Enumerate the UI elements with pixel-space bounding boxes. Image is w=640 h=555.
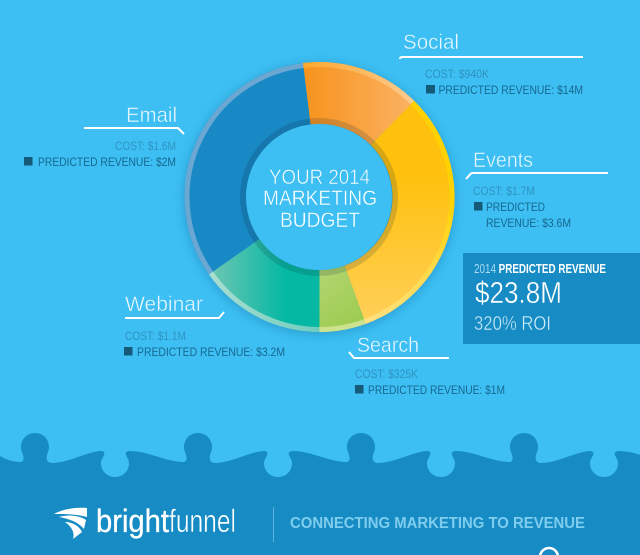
center title: MARKETING (263, 186, 377, 210)
donut chart (184, 62, 456, 335)
label: search: PREDICTED REVENUE: $1M (368, 383, 505, 397)
logo wordmark: bright (96, 503, 169, 539)
panel: total predicted revenue: $23.8M (475, 275, 562, 310)
inner shadow ring (243, 121, 395, 273)
tagline: CONNECTING MARKETING TO REVENUE (290, 515, 585, 532)
segment: social (303, 62, 414, 145)
label: email: PREDICTED REVENUE: $2M (38, 155, 176, 169)
label: events: Events (473, 148, 533, 172)
icon: brightfunnel logo mark (54, 508, 87, 539)
label: search (349, 333, 505, 397)
label: social: PREDICTED REVENUE: $14M (438, 83, 583, 97)
label: email: Email (126, 103, 177, 127)
label: social (400, 30, 583, 97)
label: search: COST: $325K (355, 367, 418, 381)
center title: YOUR 2014 (269, 165, 370, 189)
outer rim (187, 65, 452, 329)
panel: total predicted revenue (463, 253, 640, 344)
logo wordmark: funnel (169, 503, 236, 539)
label: email: COST: $1.6M (115, 139, 176, 153)
logo wordmark (96, 503, 236, 539)
label: events: PREDICTED (486, 200, 545, 214)
segment: webinar (209, 239, 320, 332)
label: social: COST: $940K (425, 67, 489, 81)
segment: search (320, 266, 366, 332)
label: events: COST: $1.7M (473, 184, 535, 198)
segment: events (344, 101, 455, 324)
label: events (466, 148, 608, 230)
label: social: Social (403, 30, 459, 54)
label: search: Search (357, 333, 419, 357)
icon: cropped circle at bottom edge (540, 548, 558, 555)
panel: total predicted revenue: 2014 PREDICTED REVENUE (474, 262, 606, 276)
footer divider (273, 507, 274, 542)
label: webinar: PREDICTED REVENUE: $3.2M (137, 345, 285, 359)
label: webinar: Webinar (125, 292, 203, 316)
center title (263, 165, 377, 232)
segment: email (184, 63, 311, 274)
label: webinar (124, 292, 285, 359)
center title: BUDGET (280, 208, 360, 232)
panel: total predicted revenue: 320% ROI (474, 313, 551, 335)
donut hole (246, 124, 392, 270)
label: email (24, 103, 184, 169)
label: events: REVENUE: $3.6M (486, 216, 571, 230)
footer band with puzzle edge (0, 433, 640, 555)
label: webinar: COST: $1.1M (125, 329, 186, 343)
